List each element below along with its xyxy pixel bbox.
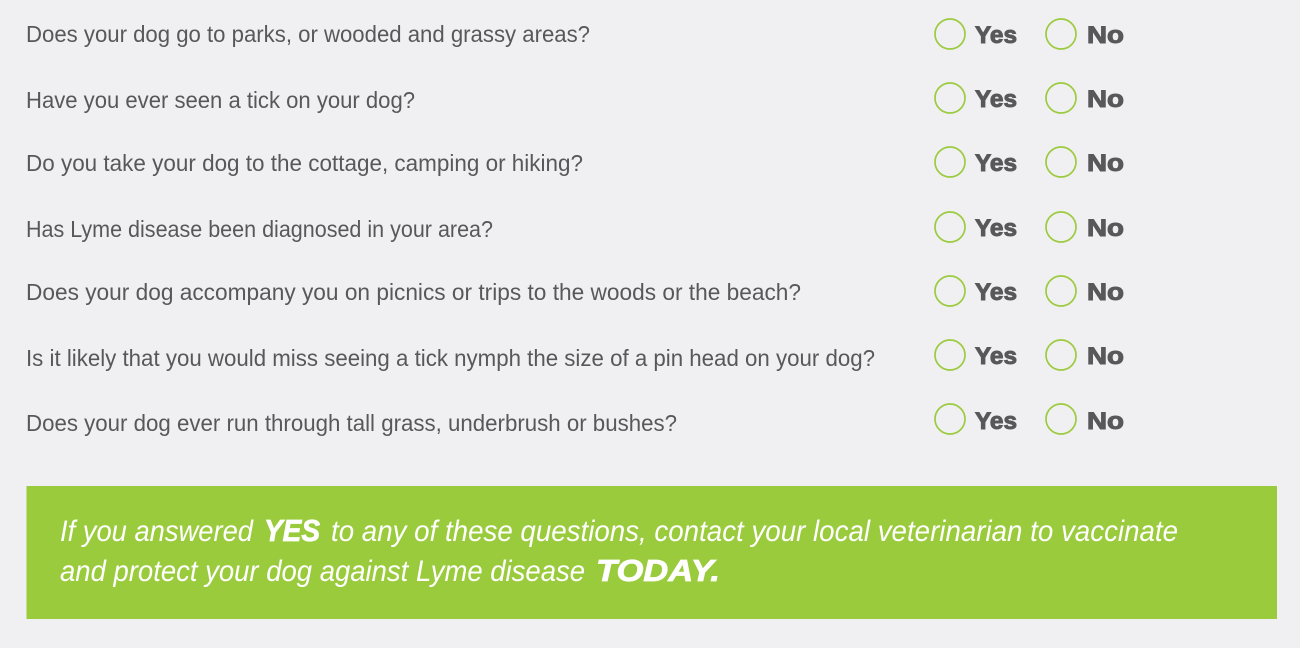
question row: picnics: Does your dog accompany you on picnics or trips to the woods or the beach?: [26, 279, 801, 305]
question row: parks: No: [1087, 22, 1124, 49]
question row: nymph: Is it likely that you would miss seeing a tick nymph the size of a pin head on your dog?: [26, 345, 875, 371]
question row: parks: [26, 19, 1124, 49]
callout banner: [26, 486, 1277, 619]
callout banner: to any of these questions, contact your local veterinarian to vaccinate: [331, 515, 1178, 548]
question row: tick seen: [26, 83, 1124, 113]
question row: picnics: [26, 276, 1124, 306]
question row: tick seen: No: [1087, 86, 1124, 113]
callout banner: YES: [264, 513, 320, 548]
question row: cottage: No: [1087, 150, 1124, 177]
question row: picnics: Yes: [975, 279, 1017, 306]
question row: diagnosed: No: [1087, 215, 1124, 242]
question row: tall grass: No: [1087, 408, 1124, 435]
question row: diagnosed: [26, 212, 1124, 242]
callout banner: and protect your dog against Lyme disease: [60, 555, 585, 588]
question row: tall grass: Does your dog ever run through tall grass, underbrush or bushes?: [26, 410, 677, 436]
question row: tick seen: Have you ever seen a tick on your dog?: [26, 87, 415, 113]
question row: diagnosed: Has Lyme disease been diagnosed in your area?: [26, 216, 493, 242]
question row: nymph: [26, 340, 1124, 371]
question row: tall grass: Yes: [975, 408, 1017, 435]
question row: cottage: Do you take your dog to the cottage, camping or hiking?: [26, 150, 583, 176]
callout banner: TODAY.: [596, 553, 720, 588]
question row: cottage: Yes: [975, 150, 1017, 177]
question row: nymph: No: [1087, 343, 1124, 370]
question row: cottage: [26, 147, 1124, 177]
question row: parks: Does your dog go to parks, or wooded and grassy areas?: [26, 21, 590, 47]
question row: tall grass: [26, 404, 1124, 436]
callout banner: If you answered: [60, 515, 254, 548]
question row: parks: Yes: [975, 22, 1017, 49]
question row: picnics: No: [1087, 279, 1124, 306]
question row: tick seen: Yes: [975, 86, 1017, 113]
question row: nymph: Yes: [975, 343, 1017, 370]
question row: diagnosed: Yes: [975, 215, 1017, 242]
